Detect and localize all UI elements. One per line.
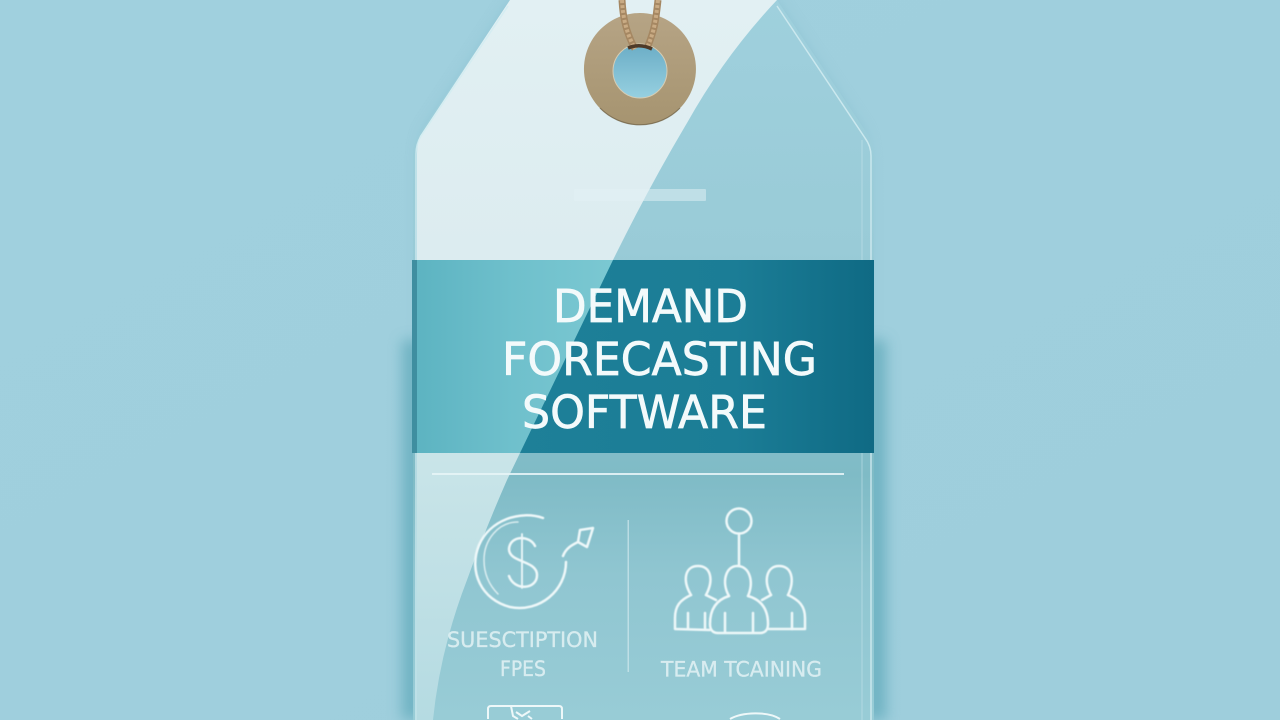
icon: cropped box xyxy=(488,706,562,719)
team training label: TEAM TCAINING xyxy=(660,658,822,682)
banner left edge xyxy=(412,260,417,453)
divider xyxy=(432,473,844,475)
banner title: FORECASTING xyxy=(502,333,817,386)
slot xyxy=(574,189,706,201)
ring hole xyxy=(613,44,667,98)
banner xyxy=(412,260,874,453)
subscription label: FPES xyxy=(500,657,546,681)
vertical divider xyxy=(628,520,629,672)
banner title: DEMAND xyxy=(553,280,748,333)
icon: subscription dollar with arrow xyxy=(475,515,593,608)
ring xyxy=(584,13,696,125)
string xyxy=(622,0,658,49)
glass highlight xyxy=(417,0,777,720)
icon: cropped arc xyxy=(730,713,780,719)
banner dark section xyxy=(413,260,874,453)
inner edge line xyxy=(861,140,863,720)
glass price tag xyxy=(412,0,874,720)
tag shadow xyxy=(420,0,868,700)
banner title: SOFTWARE xyxy=(522,386,767,439)
banner title xyxy=(502,280,817,439)
banner light section xyxy=(413,260,613,453)
ring eyelet xyxy=(584,0,696,125)
tag body xyxy=(413,0,874,720)
subscription label: SUESCTIPTION xyxy=(447,628,598,652)
subscription label xyxy=(447,628,598,681)
icon: team training xyxy=(675,508,805,633)
ring bottom shading xyxy=(600,108,680,125)
right lower shadow xyxy=(866,340,886,720)
left lower shadow xyxy=(402,340,422,720)
tag outline xyxy=(416,6,871,720)
